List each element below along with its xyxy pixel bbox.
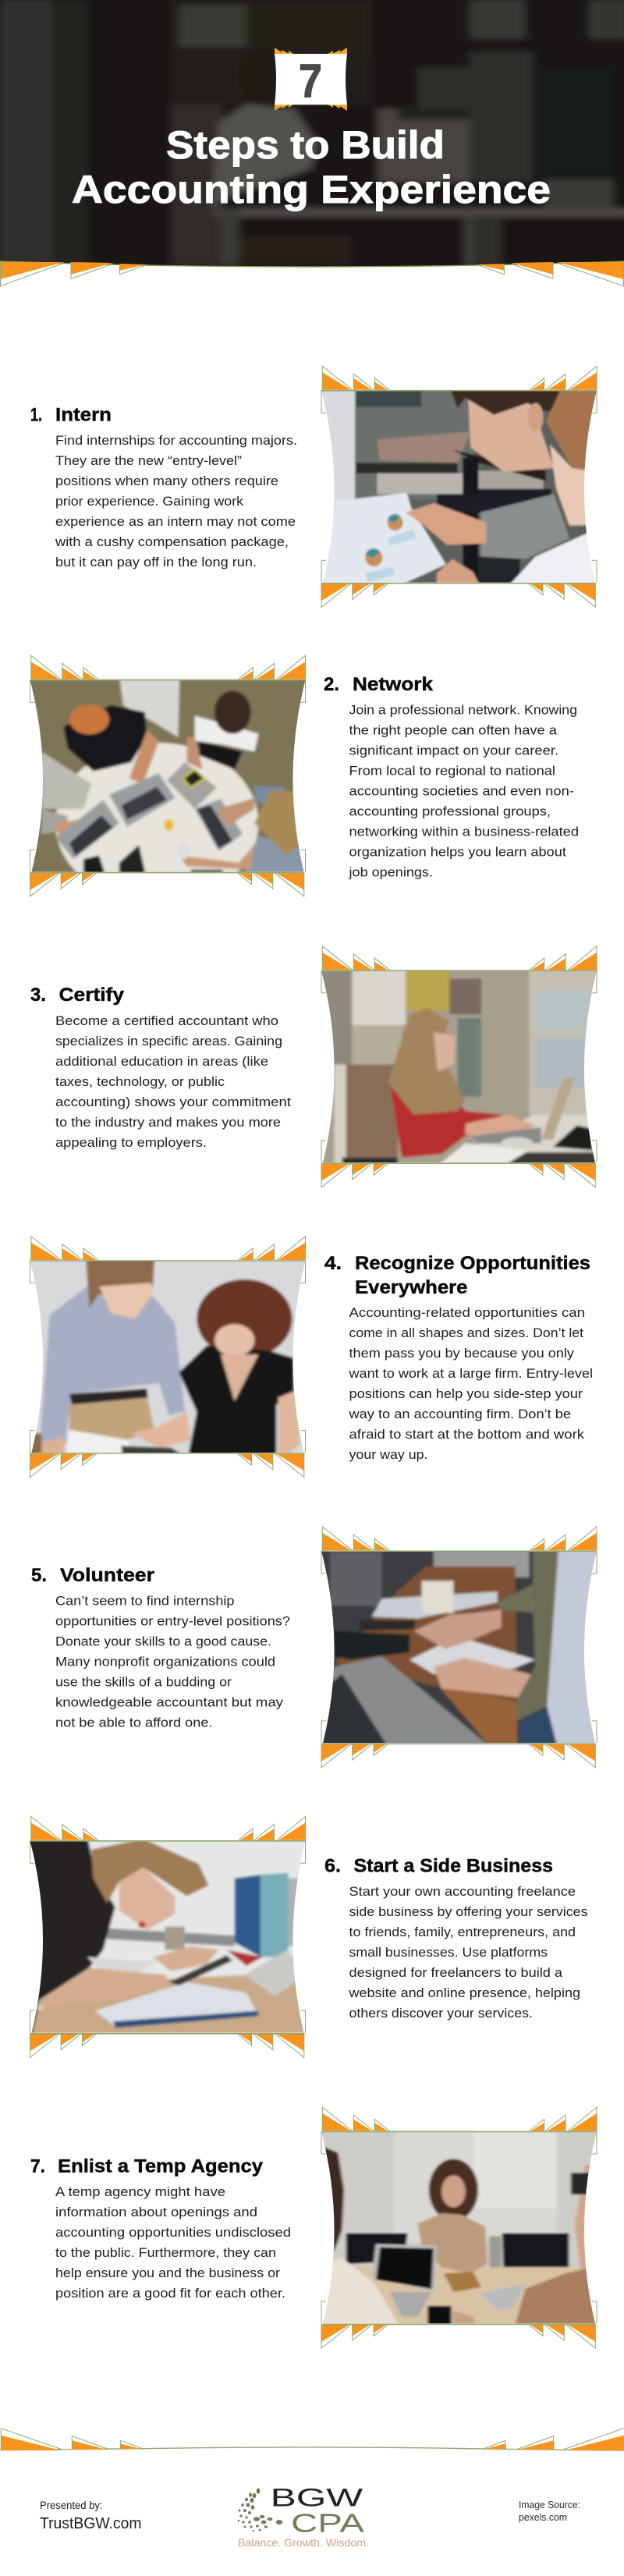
heading: Start a Side Business: 6. (324, 1855, 341, 1877)
body: Start a Side Business: others discover your services. (349, 2007, 533, 2021)
body: Network: From local to regional to national (349, 765, 555, 779)
body: Enlist a Temp Agency: to the public. Furthermore, they can (55, 2246, 276, 2260)
step 1 photo: reviewing charts (312, 366, 606, 607)
heading: Network: 2. (324, 674, 339, 695)
body: Start a Side Business: to friends, family, entrepreneurs, and (349, 1925, 576, 1939)
body: Enlist a Temp Agency: accounting opportunities undisclosed (55, 2226, 291, 2240)
footer: image source: Image Source: (519, 2500, 580, 2510)
body: Intern: with a cushy compensation package, (55, 535, 289, 549)
step 5 text (31, 1565, 290, 1730)
body: Volunteer: knowledgeable accountant but may (55, 1696, 284, 1710)
body: Recognize Opportunities: way to an accounting firm. Don’t be (348, 1407, 571, 1421)
heading: Intern: 1. (30, 404, 42, 426)
title: Accounting Experience (72, 168, 551, 211)
badge: number 7: 7 (299, 55, 322, 107)
body: Recognize Opportunities: afraid to start at the bottom and work (349, 1428, 585, 1442)
body: Network: Join a professional network. Knowing (349, 704, 577, 718)
heading: Volunteer: Volunteer (60, 1565, 155, 1586)
body: Network (348, 704, 579, 880)
body: Certify: specializes in specific areas. Gaining (55, 1034, 282, 1048)
heading: Recognize Opportunities Everywhere: Recognize Opportunities (355, 1253, 590, 1274)
body: Network: accounting societies and even non- (349, 785, 574, 799)
body: Start a Side Business: small businesses. Use platforms (349, 1946, 548, 1960)
body: Start a Side Business: side business by offering your services (349, 1905, 588, 1919)
heading: Certify: 3. (30, 985, 46, 1006)
body: Volunteer: Can’t seem to find internship (55, 1595, 234, 1609)
heading: Recognize Opportunities Everywhere: 4. (324, 1253, 342, 1274)
body: Volunteer: Many nonprofit organizations could (55, 1655, 275, 1669)
body: Certify: accounting) shows your commitment (55, 1095, 291, 1109)
heading: Enlist a Temp Agency: 7. (30, 2156, 45, 2177)
step 6 photo: woman using calculator (20, 1816, 318, 2057)
body: Intern: but it can pay off in the long run. (55, 555, 257, 569)
step 3 text (30, 985, 291, 1150)
step 1 text (30, 404, 297, 569)
body: Volunteer: Donate your skills to a good cause. (55, 1635, 271, 1649)
body: Certify: appealing to employers. (55, 1136, 207, 1150)
step 4 text (324, 1253, 593, 1462)
body: Intern: Find internships for accounting majors. (55, 434, 297, 448)
header spikes right (477, 262, 624, 286)
body: Recognize Opportunities: them pass you by because you only (349, 1347, 575, 1361)
body: Enlist a Temp Agency: position are a good fit for each other. (55, 2287, 285, 2301)
body: Enlist a Temp Agency: information about openings and (55, 2205, 257, 2219)
footer: presented by: Presented by: (40, 2500, 103, 2511)
body: Enlist a Temp Agency: help ensure you and the business or (55, 2266, 281, 2280)
step 5 photo: desk with calculator and laptop (310, 1527, 608, 1768)
footer divider with spikes (0, 2428, 624, 2450)
step 7 photo: interview meeting (310, 2107, 608, 2348)
body: Certify: additional education in areas (like (55, 1055, 268, 1069)
body: Enlist a Temp Agency: A temp agency might have (55, 2185, 225, 2199)
header spikes left (0, 262, 147, 286)
body: Network: accounting professional groups, (349, 805, 551, 819)
title (72, 123, 551, 211)
body: Intern (55, 434, 297, 569)
body: Network: the right people can often have a (349, 724, 558, 738)
body: Network: networking within a business-related (349, 825, 579, 839)
body: Certify: Become a certified accountant who (55, 1014, 278, 1028)
body: Volunteer: use the skills of a budding or (55, 1676, 232, 1690)
heading: Intern: Intern (55, 404, 112, 426)
body: Certify: to the industry and makes you more (55, 1116, 281, 1130)
body: Network: organization helps you learn about (349, 846, 566, 860)
body: Certify (55, 1014, 291, 1150)
body: Network: significant impact on your career. (349, 744, 558, 758)
body: Intern: prior experience. Gaining work (55, 495, 244, 509)
footer: logo BGW CPA (238, 2484, 369, 2549)
heading: Start a Side Business: Start a Side Business (354, 1855, 553, 1877)
body: Start a Side Business (348, 1885, 588, 2021)
body: Enlist a Temp Agency (55, 2185, 291, 2301)
step 6 text (324, 1855, 588, 2021)
step 4 photo: two women with laptop (20, 1237, 318, 1478)
step 2 text (324, 674, 579, 880)
logo tagline: Balance. Growth. Wisdom. (238, 2536, 369, 2549)
body: Recognize Opportunities: Accounting-related opportunities can (349, 1306, 585, 1320)
heading: Volunteer: 5. (31, 1565, 47, 1586)
body: Recognize Opportunities: your way up. (349, 1448, 427, 1462)
badge: number 7 (275, 48, 347, 111)
heading: Network: Network (353, 674, 433, 695)
footer: logo BGW CPA: CPA (291, 2509, 364, 2538)
step 3 photo: woman at laptop (310, 946, 608, 1187)
step 7 text (30, 2156, 291, 2301)
body: Volunteer: not be able to afford one. (55, 1716, 212, 1730)
footer: image source: pexels.com (519, 2512, 567, 2523)
body: Recognize Opportunities: positions can help you side-step your (349, 1387, 583, 1401)
body: Recognize Opportunities (348, 1306, 593, 1462)
body: Start a Side Business: website and online presence, helping (348, 1986, 580, 2000)
logo dots (238, 2488, 282, 2532)
body: Start a Side Business: designed for freelancers to build a (349, 1966, 563, 1980)
title: Steps to Build (166, 123, 445, 167)
logo wordmark: BGW (271, 2484, 363, 2512)
body: Recognize Opportunities: want to work at a large firm. Entry-level (348, 1367, 593, 1381)
body: Start a Side Business: Start your own accounting freelance (349, 1885, 576, 1899)
body: Intern: experience as an intern may not come (55, 515, 296, 529)
body: Intern: positions when many others require (55, 474, 278, 488)
header background photo (0, 0, 624, 281)
body: Volunteer (55, 1595, 290, 1730)
body: Recognize Opportunities: come in all shapes and sizes. Don’t let (349, 1326, 583, 1340)
body: Volunteer: opportunities or entry-level positions? (55, 1615, 290, 1629)
heading: Recognize Opportunities Everywhere: Everywhere (355, 1277, 468, 1298)
heading: Certify: Certify (59, 985, 124, 1006)
footer: presented by: TrustBGW.com (40, 2515, 142, 2532)
header bottom edge (0, 261, 624, 267)
heading: Enlist a Temp Agency: Enlist a Temp Agency (58, 2156, 263, 2177)
body: Intern: They are the new “entry-level” (55, 454, 242, 468)
footer: image source (519, 2500, 580, 2523)
header panel (0, 0, 624, 286)
body: Network: job openings. (348, 866, 433, 880)
footer: presented by (40, 2500, 142, 2532)
step 2 photo: team around table (20, 655, 318, 904)
body: Certify: taxes, technology, or public (55, 1075, 225, 1089)
